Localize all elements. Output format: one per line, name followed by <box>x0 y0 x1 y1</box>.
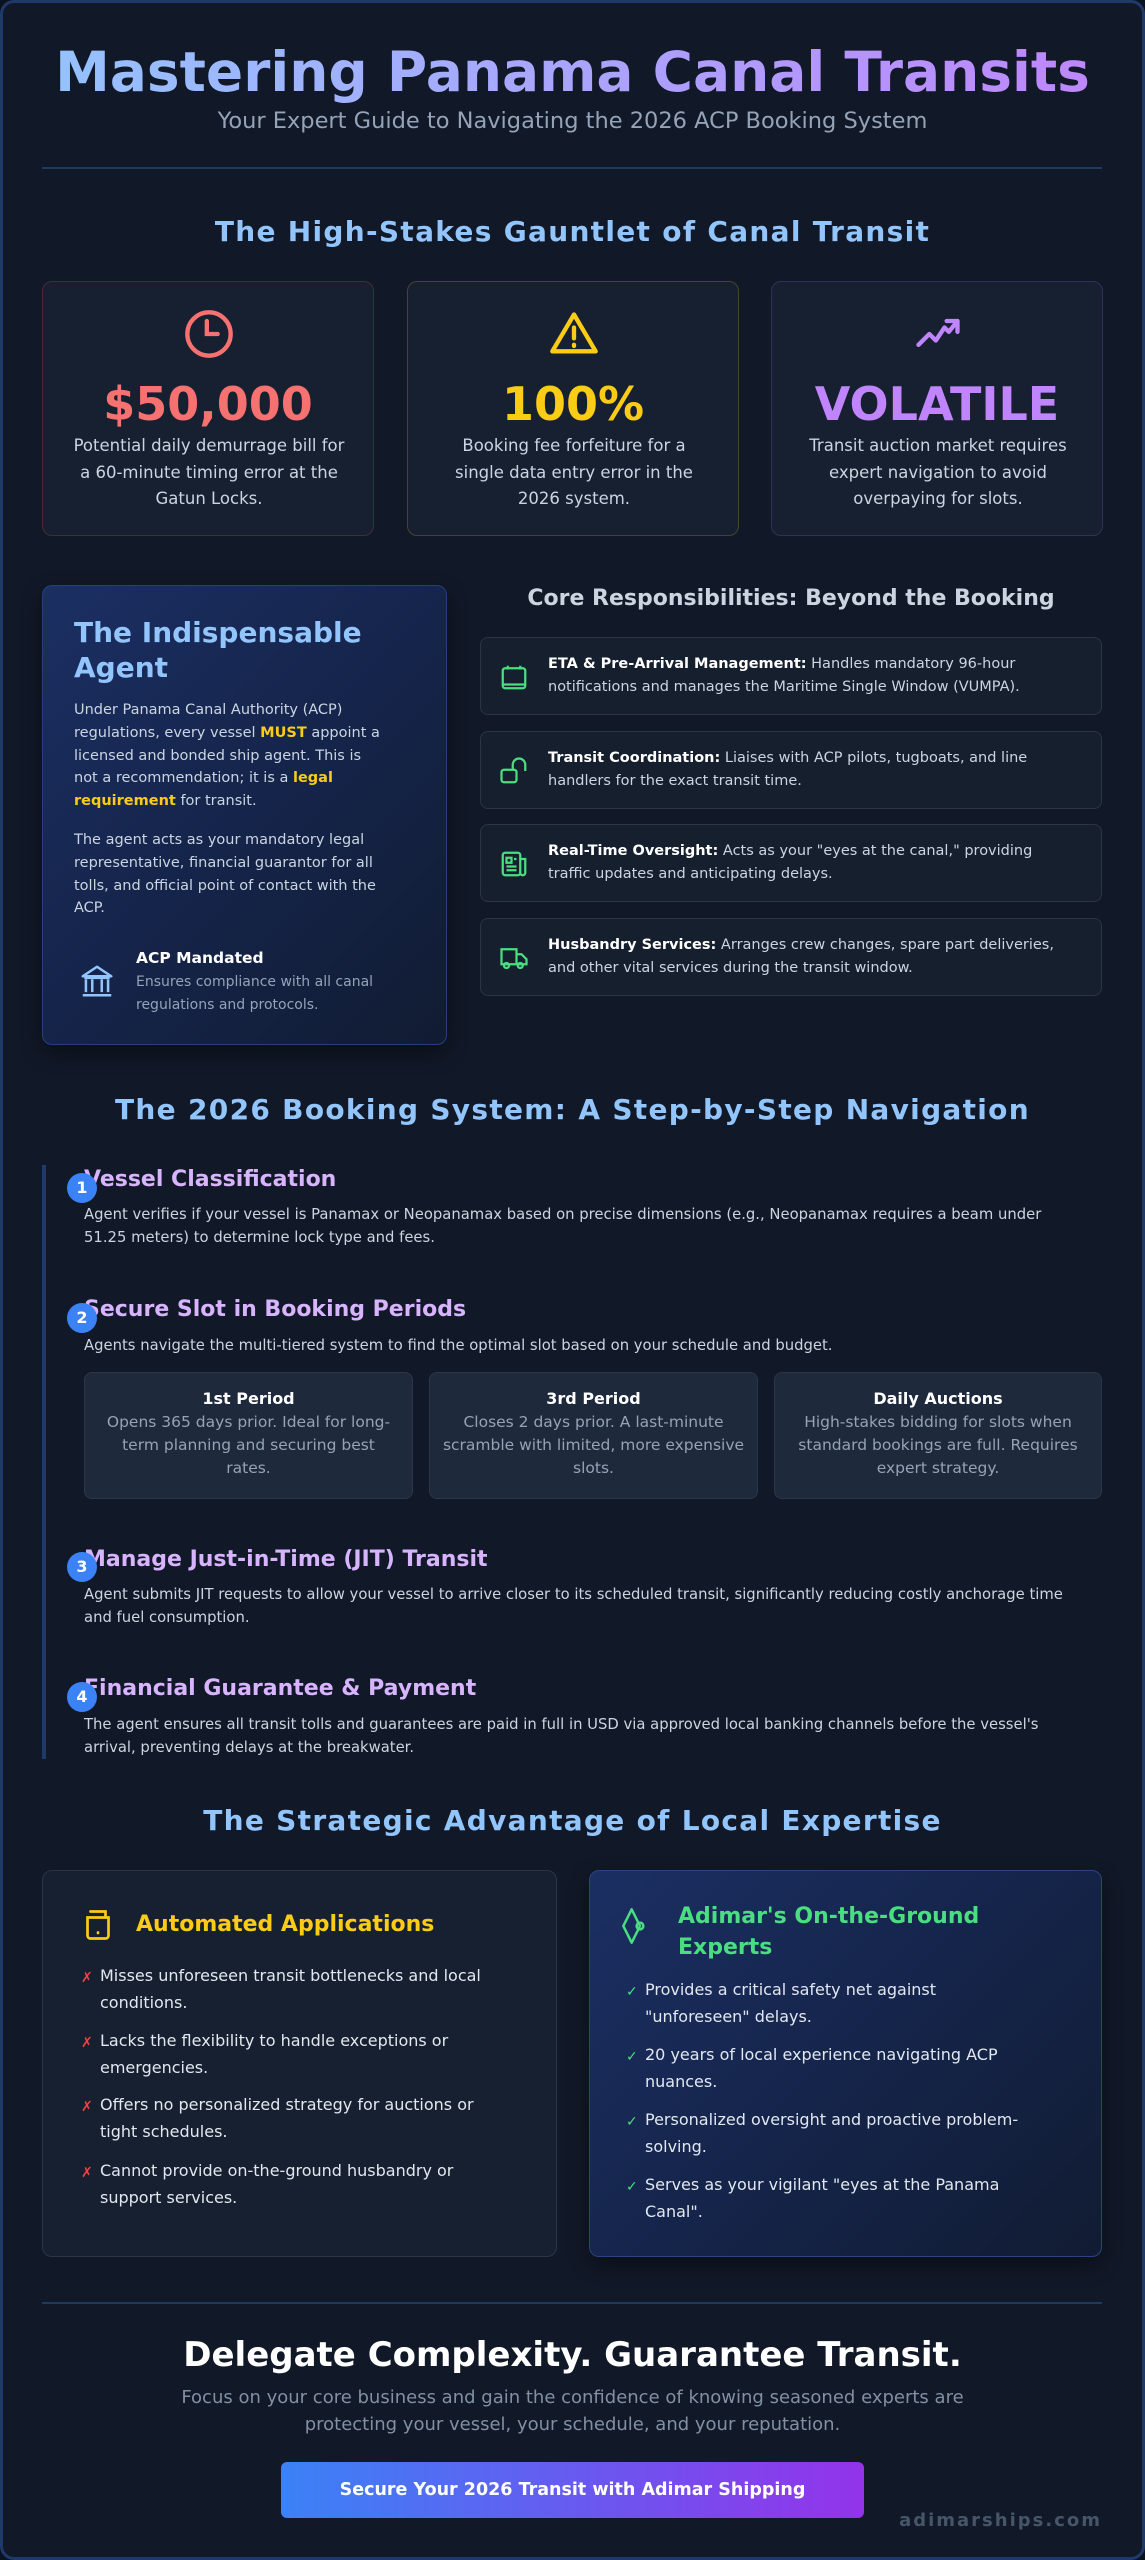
acp mandated: Ensures compliance with all canal regulations and protocols. <box>136 974 373 1013</box>
step 2 <box>67 1297 832 1354</box>
panel: automated applications: Misses unforeseen transit bottlenecks and local conditions. <box>100 1966 481 2012</box>
card: ETA: ETA & Pre-Arrival Management: Handles mandatory 96-hour notifications and manages the Maritime Single Window (VUMPA). <box>548 656 1020 695</box>
acp mandated <box>82 949 373 1013</box>
step 1: Agent verifies if your vessel is Panamax or Neopanamax based on precise dimensions (e.g., Neopanamax requires a beam under 51.25 meters) to determine lock type and fees. <box>84 1206 1041 1246</box>
card: 3rd period: 3rd Period <box>546 1389 641 1408</box>
panel: automated applications: ✗ <box>81 2035 93 2051</box>
icon: building <box>82 966 113 996</box>
card: oversight <box>480 824 1102 902</box>
icon: trend <box>916 318 960 347</box>
icon: clock <box>185 310 233 358</box>
panel: automated applications: Cannot provide on-the-ground husbandry or support services. <box>100 2161 453 2206</box>
card: 1st period <box>84 1372 413 1499</box>
card: daily auctions <box>774 1372 1102 1499</box>
title: Mastering Panama Canal Transits <box>55 40 1090 104</box>
panel: adimar experts: Provides a critical safety net against "unforeseen" delays. <box>645 1980 936 2026</box>
icon: warning <box>550 312 598 354</box>
panel: adimar experts: Personalized oversight and proactive problem-solving. <box>645 2110 1018 2156</box>
panel: automated applications: Lacks the flexibility to handle exceptions or emergencies. <box>100 2031 448 2076</box>
period cards <box>84 1372 1102 1499</box>
panel: adimar experts: Serves as your vigilant "eyes at the Panama Canal". <box>645 2175 999 2220</box>
panel: adimar experts: ✓ <box>626 2179 638 2195</box>
acp mandated: ACP Mandated <box>136 949 264 967</box>
icon: diamond <box>622 1908 645 1944</box>
card: daily auctions: Daily Auctions <box>873 1389 1003 1408</box>
stat card: demurrage <box>42 281 374 536</box>
card: daily auctions: High-stakes bidding for slots when standard bookings are full. Requires expert strategy. <box>798 1413 1078 1477</box>
card: oversight: Real-Time Oversight: Acts as your "eyes at the canal," providing traffic updates and anticipating delays. <box>548 843 1032 882</box>
step 4: Financial Guarantee & Payment <box>84 1676 476 1701</box>
step 4 <box>67 1676 1038 1756</box>
panel: adimar experts: ✓ <box>626 2049 638 2065</box>
agent paragraph 2: The agent acts as your mandatory legal representative, financial guarantor for all tolls, and official point of contact with the ACP. <box>74 832 376 916</box>
card: ETA <box>480 637 1102 715</box>
card: 1st period: Opens 365 days prior. Ideal for long-term planning and securing best rates. <box>107 1413 390 1477</box>
cta button: Secure Your 2026 Transit with Adimar Shipping <box>340 2480 805 2500</box>
step 2: 2 <box>76 1308 88 1327</box>
panel: automated applications: Automated Applications <box>136 1912 434 1937</box>
panel: automated applications: Offers no personalized strategy for auctions or tight schedules. <box>100 2095 474 2140</box>
step 1: 1 <box>76 1178 88 1197</box>
step 2: Secure Slot in Booking Periods <box>84 1297 466 1322</box>
panel: automated applications: ✗ <box>81 2099 93 2115</box>
heading: core responsibilities: Core Responsibilities: Beyond the Booking <box>527 586 1055 611</box>
stat card: forfeiture: 100% <box>502 377 644 431</box>
timeline <box>42 1165 46 1759</box>
step 3: Agent submits JIT requests to allow your vessel to arrive closer to its scheduled transit, significantly reducing costly anchorage time and fuel consumption. <box>84 1586 1063 1626</box>
card: husbandry: Husbandry Services: Arranges crew changes, spare part deliveries, and other vital services during the transit window. <box>548 937 1054 976</box>
subtitle: Your Expert Guide to Navigating the 2026 ACP Booking System <box>218 108 927 134</box>
agent title: The Indispensable Agent <box>74 616 362 684</box>
icon: unlock <box>500 757 526 784</box>
panel: automated applications <box>42 1870 557 2257</box>
panel: adimar experts: ✓ <box>626 1984 638 2000</box>
step 4: The agent ensures all transit tolls and guarantees are paid in full in USD via approved local banking channels before the vessel's arrival, preventing delays at the breakwater. <box>84 1716 1038 1756</box>
card: 3rd period: Closes 2 days prior. A last-minute scramble with limited, more expensive slots. <box>443 1413 744 1477</box>
card: 3rd period <box>429 1372 758 1499</box>
stat card: demurrage: Potential daily demurrage bill for a 60-minute timing error at the Gatun Locks. <box>74 436 344 508</box>
icon: jar <box>86 1910 110 1940</box>
step 2: Agents navigate the multi-tiered system to find the optimal slot based on your schedule and budget. <box>84 1337 832 1354</box>
step 1 <box>67 1167 1042 1246</box>
step 1: Vessel Classification <box>84 1167 336 1192</box>
cta heading: Delegate Complexity. Guarantee Transit. <box>183 2335 962 2375</box>
panel: adimar experts: Adimar's On-the-Ground Experts <box>678 1904 979 1960</box>
step 3: 3 <box>76 1557 88 1576</box>
agent paragraph 1: Under Panama Canal Authority (ACP) regulations, every vessel MUST appoint a licensed and bonded ship agent. This is not a recommendation; it is a legal requirement for transit. <box>74 702 380 809</box>
cta text: Focus on your core business and gain the confidence of knowing seasoned experts are protecting your vessel, your schedule, and your reputation. <box>181 2387 964 2435</box>
panel: adimar experts: ✓ <box>626 2114 638 2130</box>
card: husbandry <box>480 918 1102 996</box>
card: 1st period: 1st Period <box>202 1389 295 1408</box>
icon: truck <box>500 948 528 970</box>
heading: booking system: The 2026 Booking System: A Step-by-Step Navigation <box>115 1093 1030 1126</box>
icon: calendar <box>502 666 526 690</box>
icon: newspaper <box>502 852 526 876</box>
card: transit coordination: Transit Coordination: Liaises with ACP pilots, tugboats, and line handlers for the exact transit time. <box>548 750 1027 789</box>
card: transit coordination <box>480 731 1102 809</box>
panel: automated applications: ✗ <box>81 1970 93 1986</box>
step 3: Manage Just-in-Time (JIT) Transit <box>84 1547 488 1572</box>
heading: strategic advantage: The Strategic Advantage of Local Expertise <box>203 1804 942 1837</box>
stat card: demurrage: $50,000 <box>103 377 313 431</box>
heading: high-stakes: The High-Stakes Gauntlet of Canal Transit <box>215 215 930 248</box>
stat card: volatile: VOLATILE <box>815 377 1059 431</box>
stat card: volatile <box>771 281 1103 536</box>
panel: adimar experts <box>589 1870 1102 2257</box>
panel: automated applications: ✗ <box>81 2165 93 2181</box>
footer brand: adimarships.com <box>899 2510 1102 2531</box>
cta button <box>281 2462 864 2518</box>
stat card: forfeiture <box>407 281 739 536</box>
stat card: volatile: Transit auction market requires expert navigation to avoid overpaying for slots. <box>809 436 1067 508</box>
step 4: 4 <box>76 1687 88 1706</box>
step 3 <box>67 1547 1063 1626</box>
panel: adimar experts: 20 years of local experience navigating ACP nuances. <box>645 2045 998 2090</box>
panel: indispensable agent <box>42 585 447 1045</box>
stat card: forfeiture: Booking fee forfeiture for a single data entry error in the 2026 system. <box>455 436 693 508</box>
